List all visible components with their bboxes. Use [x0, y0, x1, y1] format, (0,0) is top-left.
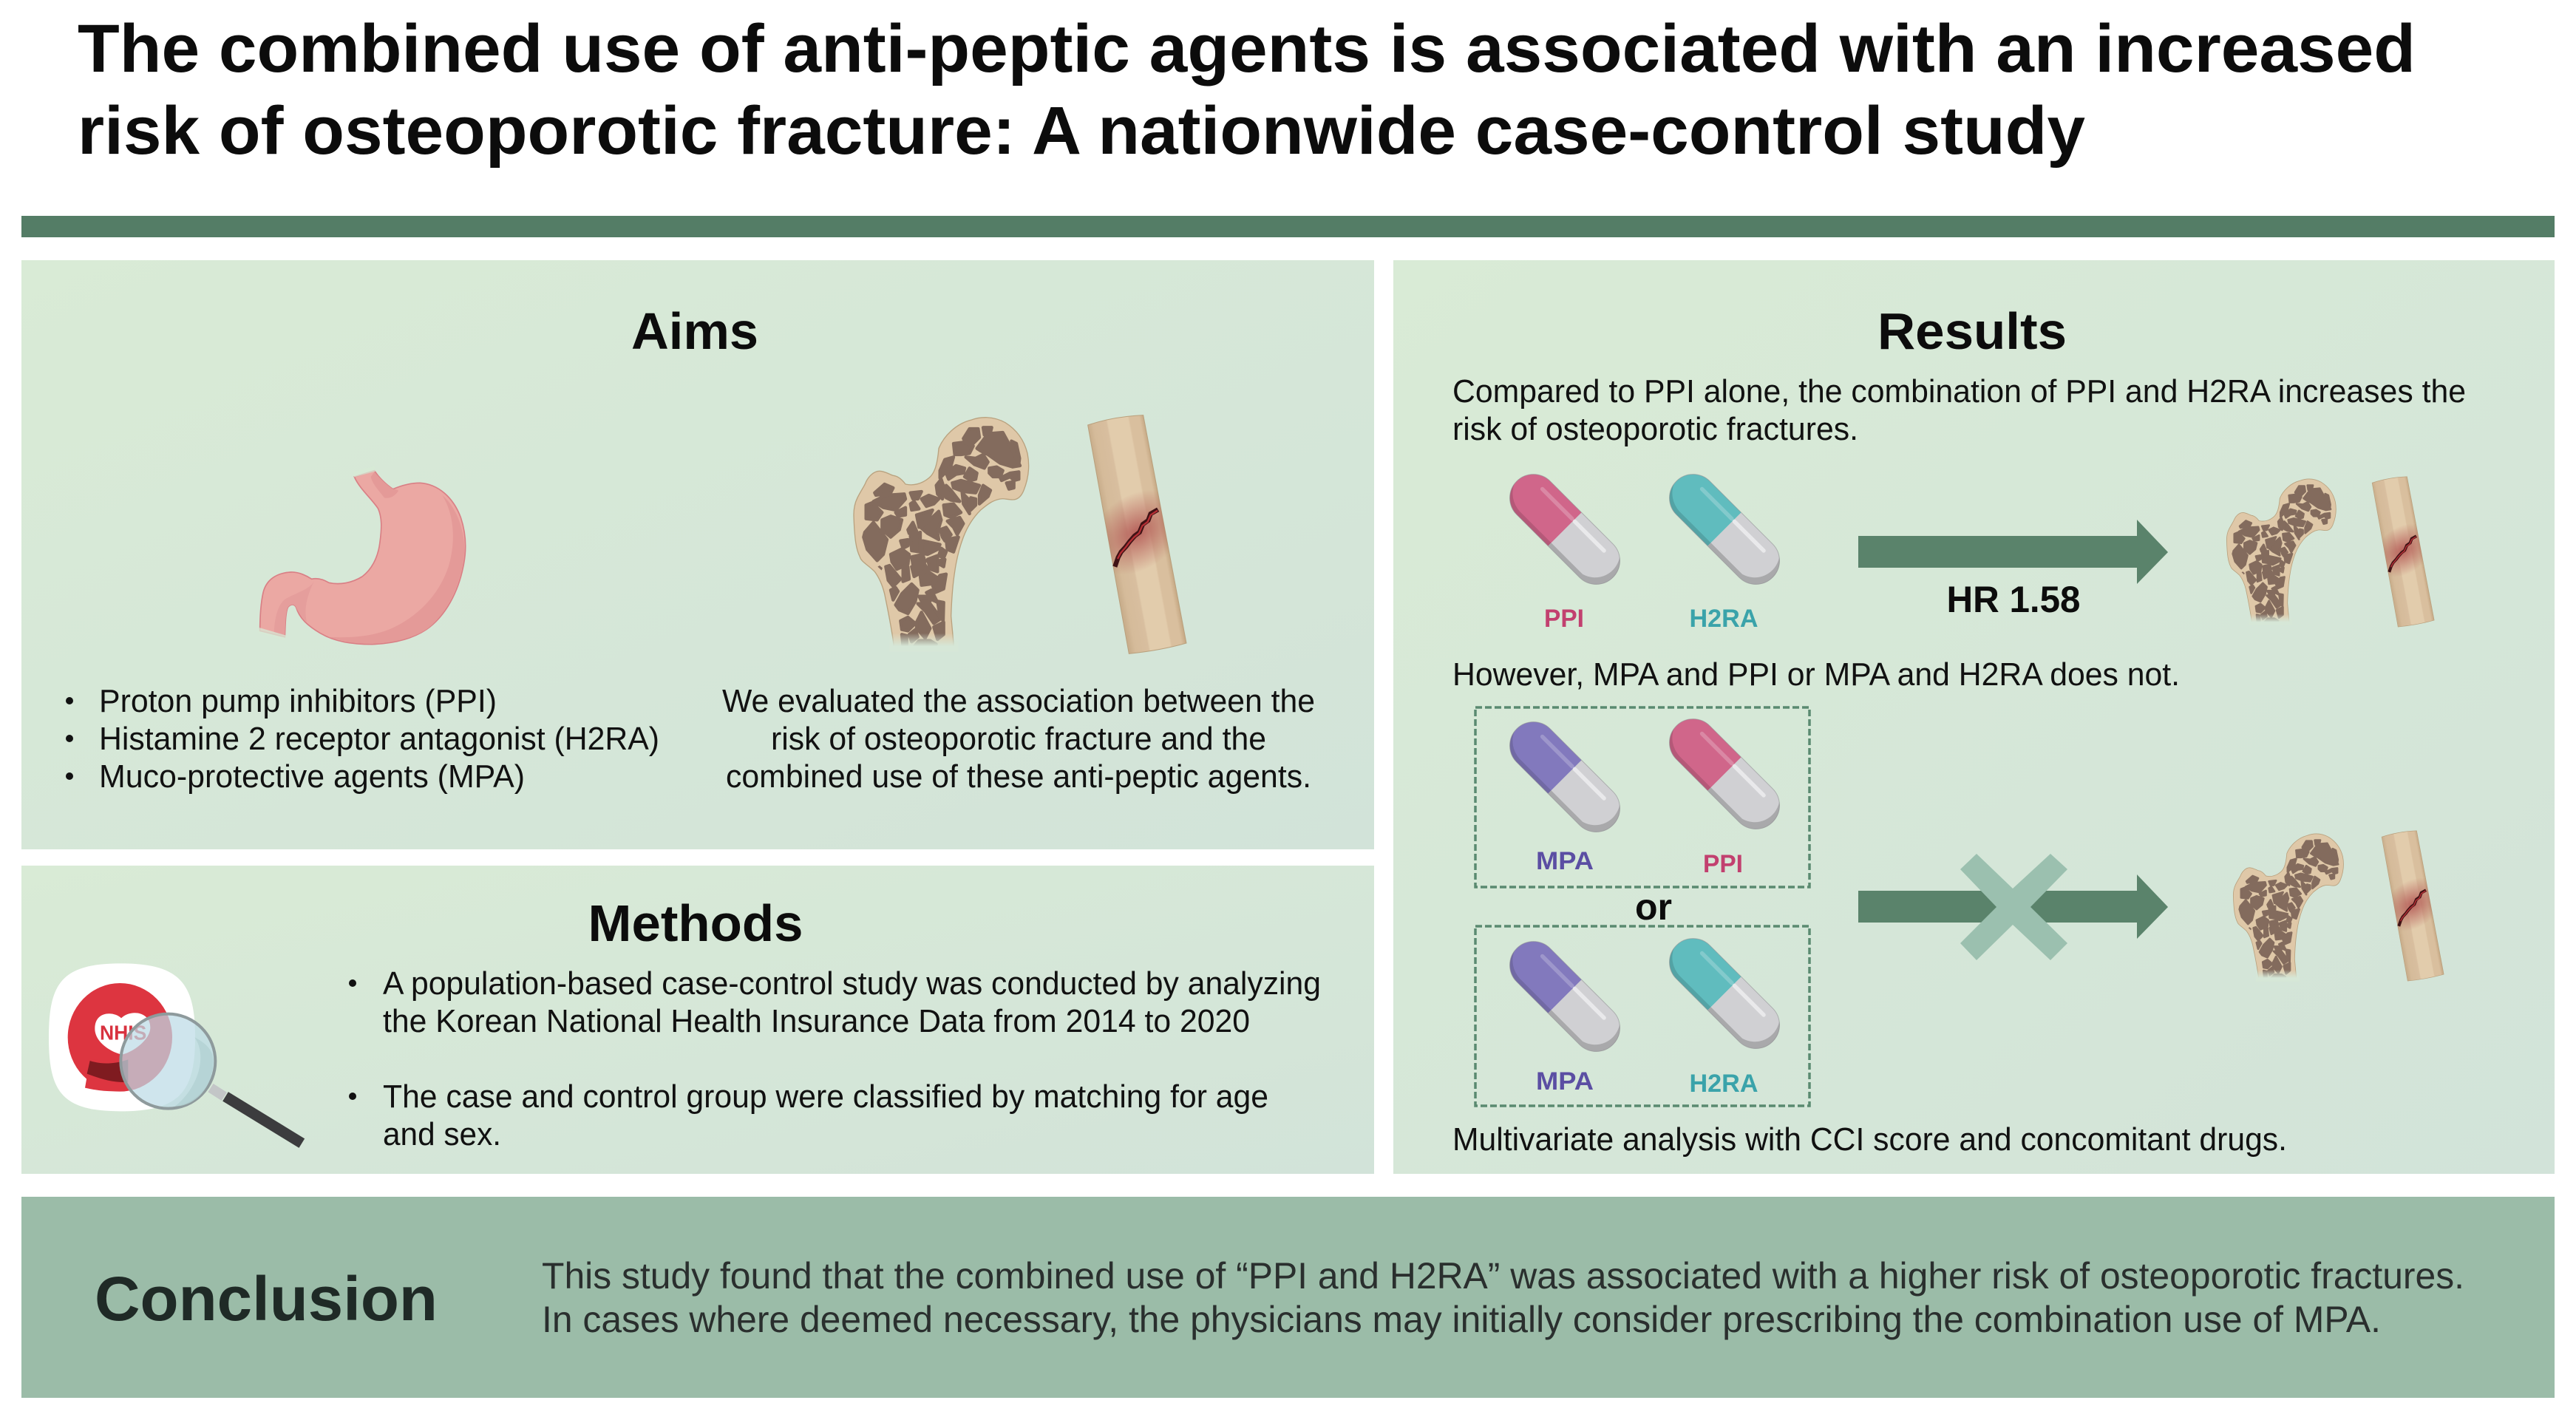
group: MPA and H2RA: MPA [1536, 1067, 1594, 1095]
panel: conclusion [21, 1197, 2555, 1398]
aims statement: We evaluated the association between the [722, 683, 1315, 719]
conclusion text [542, 1255, 2464, 1340]
icon: NHIS logo with magnifier [49, 963, 302, 1144]
label: HR 1.58: HR 1.58 [1947, 579, 2080, 620]
heading: aims: Aims [631, 302, 758, 360]
icon: femur bone [2233, 834, 2343, 982]
group: MPA and H2RA: H2RA [1690, 1070, 1758, 1098]
finding: PPI plus H2RA [1452, 373, 2466, 447]
icon: fractured bone [2373, 831, 2453, 981]
label: or: or [1635, 886, 1672, 928]
group: MPA and PPI [1475, 707, 1809, 887]
methods bullets: The case and control group were classified by matching for age [383, 1078, 1268, 1115]
conclusion text: This study found that the combined use of “PPI and H2RA” was associated with a higher risk of osteoporotic fractures. [542, 1255, 2464, 1297]
finding: PPI plus H2RA: risk of osteoporotic fractures. [1452, 411, 1858, 447]
title: risk of osteoporotic fracture: A nationwide case-control study [78, 93, 2085, 169]
list: anti-peptic agents: Histamine 2 receptor antagonist (H2RA) [99, 721, 659, 757]
methods bullets: A population-based case-control study was conducted by analyzing [383, 965, 1321, 1002]
arrow: increased risk [1858, 520, 2168, 584]
heading: methods: Methods [588, 894, 803, 952]
panel: results [1393, 260, 2555, 1174]
methods bullets: the Korean National Health Insurance Data from 2014 to 2020 [383, 1003, 1250, 1039]
aims statement: combined use of these anti-peptic agents. [726, 758, 1311, 795]
list: anti-peptic agents [66, 683, 659, 795]
aims statement [722, 683, 1315, 795]
title divider bar [21, 216, 2555, 237]
icon: femur bone [854, 418, 1029, 652]
aims statement: risk of osteoporotic fracture and the [771, 721, 1266, 757]
capsule: H2RA [1659, 464, 1790, 633]
arrow: no association [1858, 874, 2168, 939]
heading: results: Results [1877, 302, 2067, 360]
list: anti-peptic agents: Proton pump inhibitors (PPI) [99, 683, 497, 719]
capsule: PPI [1500, 464, 1630, 633]
icon: fractured bone [1073, 415, 1200, 653]
capsule: PPI: PPI [1544, 605, 1584, 633]
group: MPA and H2RA [1475, 926, 1809, 1106]
capsule: H2RA: H2RA [1690, 605, 1758, 633]
conclusion text: In cases where deemed necessary, the physicians may initially consider prescribing the combination use of MPA. [542, 1299, 2381, 1340]
icon: femur bone [2226, 479, 2336, 625]
panel: aims [21, 260, 1374, 849]
icon: NHIS logo with magnifier: NHIS [100, 1022, 146, 1044]
analysis note: Multivariate analysis with CCI score and concomitant drugs. [1452, 1121, 2287, 1158]
list: anti-peptic agents: Muco-protective agents (MPA) [99, 758, 525, 795]
finding: PPI plus H2RA: Compared to PPI alone, the combination of PPI and H2RA increases the [1452, 373, 2466, 410]
icon: cross [1960, 854, 2067, 960]
heading: conclusion: Conclusion [95, 1264, 438, 1334]
methods bullets: and sex. [383, 1116, 501, 1152]
title: The combined use of anti-peptic agents is associated with an increased [78, 11, 2416, 86]
group: MPA and PPI: PPI [1703, 850, 1743, 878]
icon: fractured bone [2363, 477, 2443, 627]
title [78, 11, 2416, 169]
methods bullets [349, 965, 1321, 1152]
icon: stomach [259, 469, 466, 645]
panel: methods [21, 866, 1374, 1174]
finding: MPA combinations: However, MPA and PPI or MPA and H2RA does not. [1452, 656, 2180, 693]
group: MPA and PPI: MPA [1536, 847, 1594, 875]
